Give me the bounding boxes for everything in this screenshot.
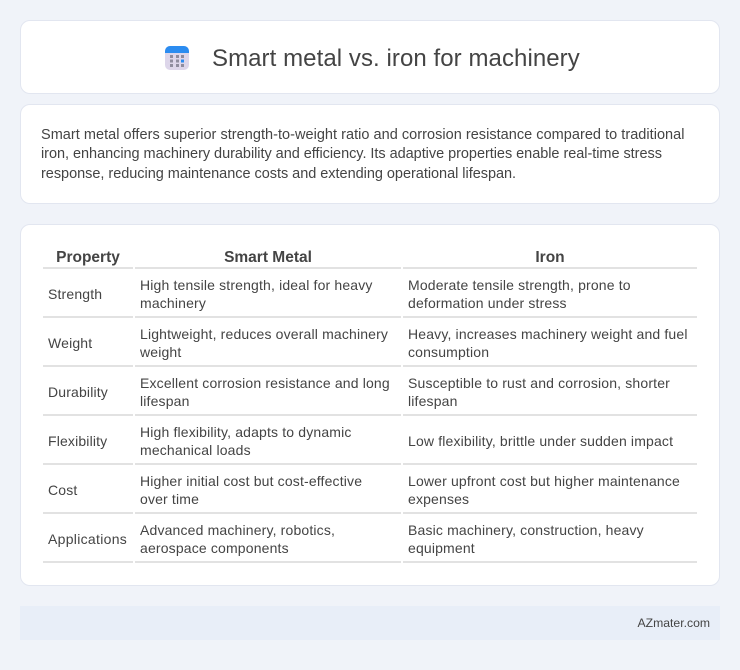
Applications: Iron: equipment [408, 540, 475, 556]
Flexibility: Smart Metal [140, 424, 352, 458]
Weight: Smart Metal [140, 326, 388, 360]
footer text: AZmater.com [638, 616, 710, 630]
Cost: Iron: expenses [408, 491, 469, 507]
Flexibility: Smart Metal: mechanical loads [140, 442, 251, 458]
Durability: Smart Metal [140, 375, 390, 409]
Weight: Iron: consumption [408, 344, 489, 360]
Weight: Smart Metal: Lightweight, reduces overall machinery [140, 326, 388, 342]
Durability: Smart Metal: lifespan [140, 393, 190, 409]
row label: Strength: Strength [48, 286, 102, 302]
Applications: Smart Metal [140, 522, 335, 556]
title card [20, 20, 720, 94]
Applications: Smart Metal: aerospace components [140, 540, 289, 556]
Durability: Smart Metal: Excellent corrosion resistance and long [140, 375, 390, 391]
Applications: Smart Metal: Advanced machinery, robotics, [140, 522, 335, 538]
table heading: Iron: Iron [535, 249, 565, 266]
Weight: Smart Metal: weight [140, 344, 181, 360]
icon: calendar [165, 46, 189, 70]
table heading: Smart Metal: Smart Metal [224, 249, 312, 266]
Applications: Iron [408, 522, 644, 556]
Durability: Iron: Susceptible to rust and corrosion, shorter [408, 375, 670, 391]
row label: Cost: Cost [48, 482, 77, 498]
Cost: Smart Metal: over time [140, 491, 199, 507]
Strength: Smart Metal: machinery [140, 295, 206, 311]
row label: Applications: Applications [48, 531, 127, 547]
Strength: Iron: Moderate tensile strength, prone to [408, 277, 631, 293]
Durability: Iron [408, 375, 670, 409]
Flexibility: Iron: Low flexibility, brittle under sudden impact [408, 433, 673, 449]
Weight: Iron [408, 326, 688, 360]
Cost: Smart Metal: Higher initial cost but cost-effective [140, 473, 362, 489]
summary text: response, reducing maintenance costs and extending operational lifespan. [41, 166, 516, 182]
Strength: Smart Metal: High tensile strength, ideal for heavy [140, 277, 373, 293]
Cost: Smart Metal [140, 473, 362, 507]
row label: Durability: Durability [48, 384, 108, 400]
summary text [41, 126, 684, 182]
Strength: Iron [408, 277, 631, 311]
Cost: Iron: Lower upfront cost but higher maintenance [408, 473, 680, 489]
panel: comparison table [20, 224, 720, 586]
summary text: Smart metal offers superior strength-to-weight ratio and corrosion resistance compared to traditional [41, 126, 684, 142]
footer bar [20, 606, 720, 640]
title: Smart metal vs. iron for machinery [212, 45, 580, 72]
table heading: Property: Property [56, 249, 120, 266]
Weight: Iron: Heavy, increases machinery weight and fuel [408, 326, 688, 342]
Durability: Iron: lifespan [408, 393, 458, 409]
Strength: Iron: deformation under stress [408, 295, 567, 311]
row label: Weight: Weight [48, 335, 92, 351]
Strength: Smart Metal [140, 277, 373, 311]
summary text: iron, enhancing machinery durability and efficiency. Its adaptive properties enable real-time stress [41, 146, 662, 162]
row label: Flexibility: Flexibility [48, 433, 107, 449]
panel: summary [20, 104, 720, 204]
Cost: Iron [408, 473, 680, 507]
Flexibility: Smart Metal: High flexibility, adapts to dynamic [140, 424, 352, 440]
Applications: Iron: Basic machinery, construction, heavy [408, 522, 644, 538]
